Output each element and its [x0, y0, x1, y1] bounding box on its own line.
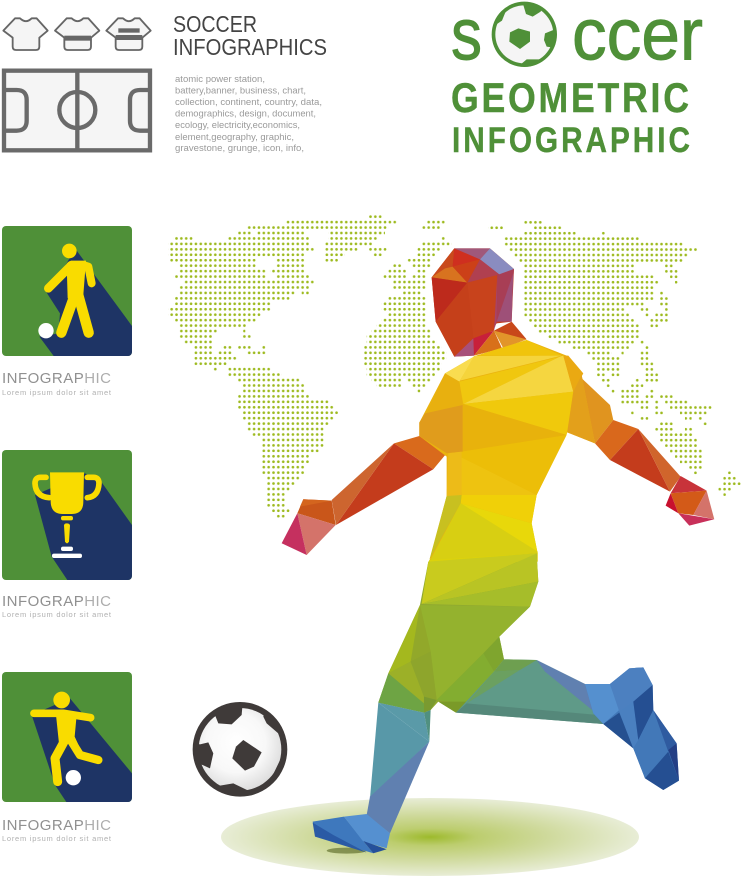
title: geometric infographic: INFOGRAPHIC: [452, 121, 690, 160]
icon: shirt with one band: [55, 18, 99, 50]
label: third card caption: INFOGRAPHIC: [2, 817, 111, 834]
panel: trophy card: [2, 450, 132, 619]
player: head: [432, 248, 527, 357]
label: first card caption: [2, 370, 112, 397]
panel: player kicking ball card: [2, 226, 132, 397]
label: second card caption: INFOGRAPHIC: [2, 593, 111, 610]
label: first card caption: Lorem ipsum dolor sit amet: [2, 388, 112, 397]
player: left arm: [282, 436, 447, 555]
text block: keywords: battery,banner, business, chart,: [175, 86, 306, 96]
player: front leg: [367, 703, 431, 833]
label: third card caption: [2, 817, 112, 843]
text block: keywords: atomic power station,: [175, 74, 265, 85]
icon: plain shirt: [3, 18, 48, 50]
illustration: soccer ball: [190, 702, 290, 798]
label: first card caption: INFOGRAPHIC: [2, 370, 111, 387]
text block: keywords: collection, continent, country, data,: [175, 97, 322, 108]
player: rear leg: [456, 659, 603, 724]
player: legs and boots: [313, 553, 679, 854]
player: torso: [419, 340, 595, 562]
panel: player shooting card: [2, 672, 132, 843]
icon: soccer pitch: [4, 71, 150, 150]
icon: shirt with two bands: [106, 18, 151, 50]
icon: player shooting: [2, 672, 132, 805]
heading: soccer infographics: [173, 11, 327, 60]
map: americas, europe and africa: [170, 217, 450, 516]
ground shadow ellipse: [221, 798, 639, 876]
heading: soccer infographics: SOCCER: [173, 11, 257, 37]
text block: keywords: demographics, design, document,: [175, 108, 316, 120]
player: rear boot: [585, 667, 679, 790]
player: head, torso and arms: [282, 248, 714, 562]
player: front boot: [313, 814, 390, 854]
title: geometric infographic: [451, 75, 690, 160]
text block: keywords: element,geography, graphic,: [175, 132, 294, 143]
title: geometric infographic: GEOMETRIC: [451, 75, 689, 122]
text block: keywords: gravestone, grunge, icon, info,: [175, 143, 304, 154]
icon: green soccer ball in logo: [490, 2, 557, 70]
icon: player with ball: [2, 226, 132, 360]
player: hips and thigh: [378, 553, 538, 713]
heading: soccer infographics: INFOGRAPHICS: [173, 34, 327, 60]
title: soccer logo word: [452, 2, 702, 67]
map: asia and australia: [490, 222, 740, 494]
icon: trophy: [2, 450, 132, 585]
label: third card caption: Lorem ipsum dolor sit amet: [2, 834, 112, 843]
player: right arm: [580, 377, 714, 526]
illustration: low-poly soccer player: [282, 248, 714, 854]
label: second card caption: Lorem ipsum dolor sit amet: [2, 610, 112, 619]
label: second card caption: [2, 593, 112, 619]
icon: three soccer shirts: [3, 18, 151, 50]
text block: keywords: [175, 74, 322, 154]
text block: keywords: ecology, electricity,economics,: [175, 120, 300, 131]
chart: dotted world map: [170, 217, 740, 516]
